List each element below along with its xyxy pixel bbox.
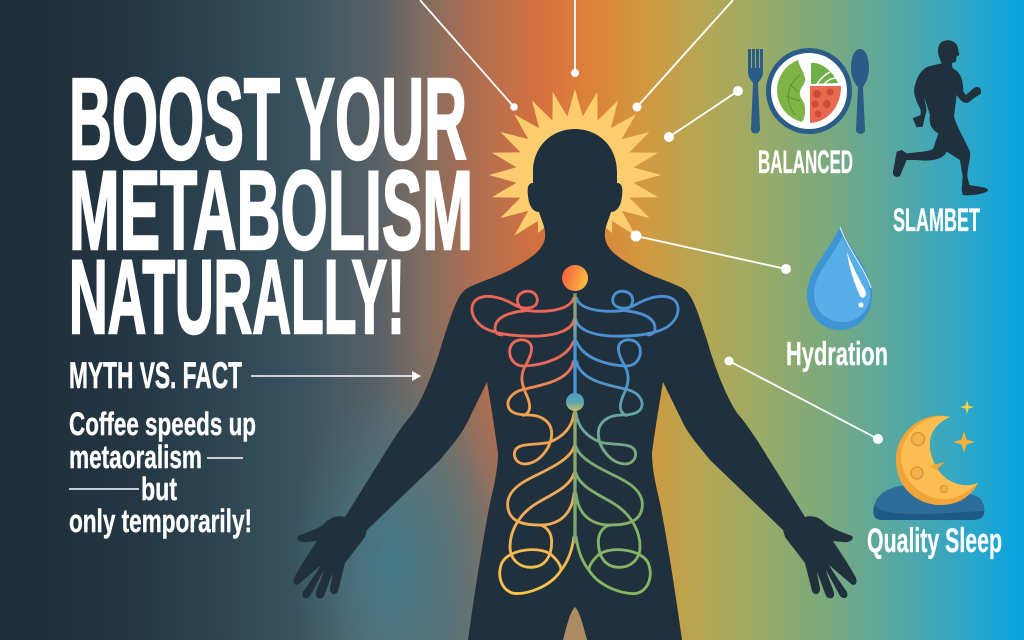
pillow: [873, 485, 984, 520]
label: balanced: BALANCED: [758, 144, 853, 180]
tomato slices: [810, 86, 841, 123]
title: BOOST YOUR: [69, 54, 467, 184]
spoon: [851, 49, 869, 134]
icon: runner silhouette: [893, 40, 988, 195]
moon: [896, 416, 978, 505]
title: [69, 54, 473, 356]
title: NATURALLY!: [69, 239, 405, 356]
icon: sun burst behind head: [489, 89, 661, 236]
spine line: [570, 293, 580, 543]
right nerve branches: [576, 291, 678, 594]
subheading: myth vs. fact: MYTH VS. FACT: [69, 355, 242, 396]
nervous system lines: [472, 291, 678, 594]
greens: [811, 63, 838, 84]
label: hydration: Hydration: [786, 335, 888, 372]
human body silhouette: [293, 129, 857, 640]
lower energy node: [566, 393, 584, 411]
fork: [748, 49, 763, 134]
left nerve branches: [472, 291, 574, 594]
stars: [953, 431, 975, 453]
icon: moon on pillow with stars: [873, 400, 984, 520]
text block: coffee fact: but: [141, 471, 177, 507]
text block: coffee fact: [69, 406, 256, 539]
text block: coffee fact: Coffee speeds up: [69, 406, 256, 442]
lettuce: [777, 60, 805, 122]
title: METABOLISM: [69, 148, 473, 273]
text block: coffee fact: only temporarily!: [69, 503, 252, 539]
arrow: myth to body: [251, 371, 421, 381]
plate: [768, 50, 850, 132]
icon: water drop: [807, 227, 872, 330]
icon: balanced plate with fork and spoon: [748, 49, 869, 134]
text block: coffee fact: metaoralism: [69, 439, 202, 475]
callout lines and dots: [420, 0, 883, 444]
top energy node: [562, 265, 588, 291]
